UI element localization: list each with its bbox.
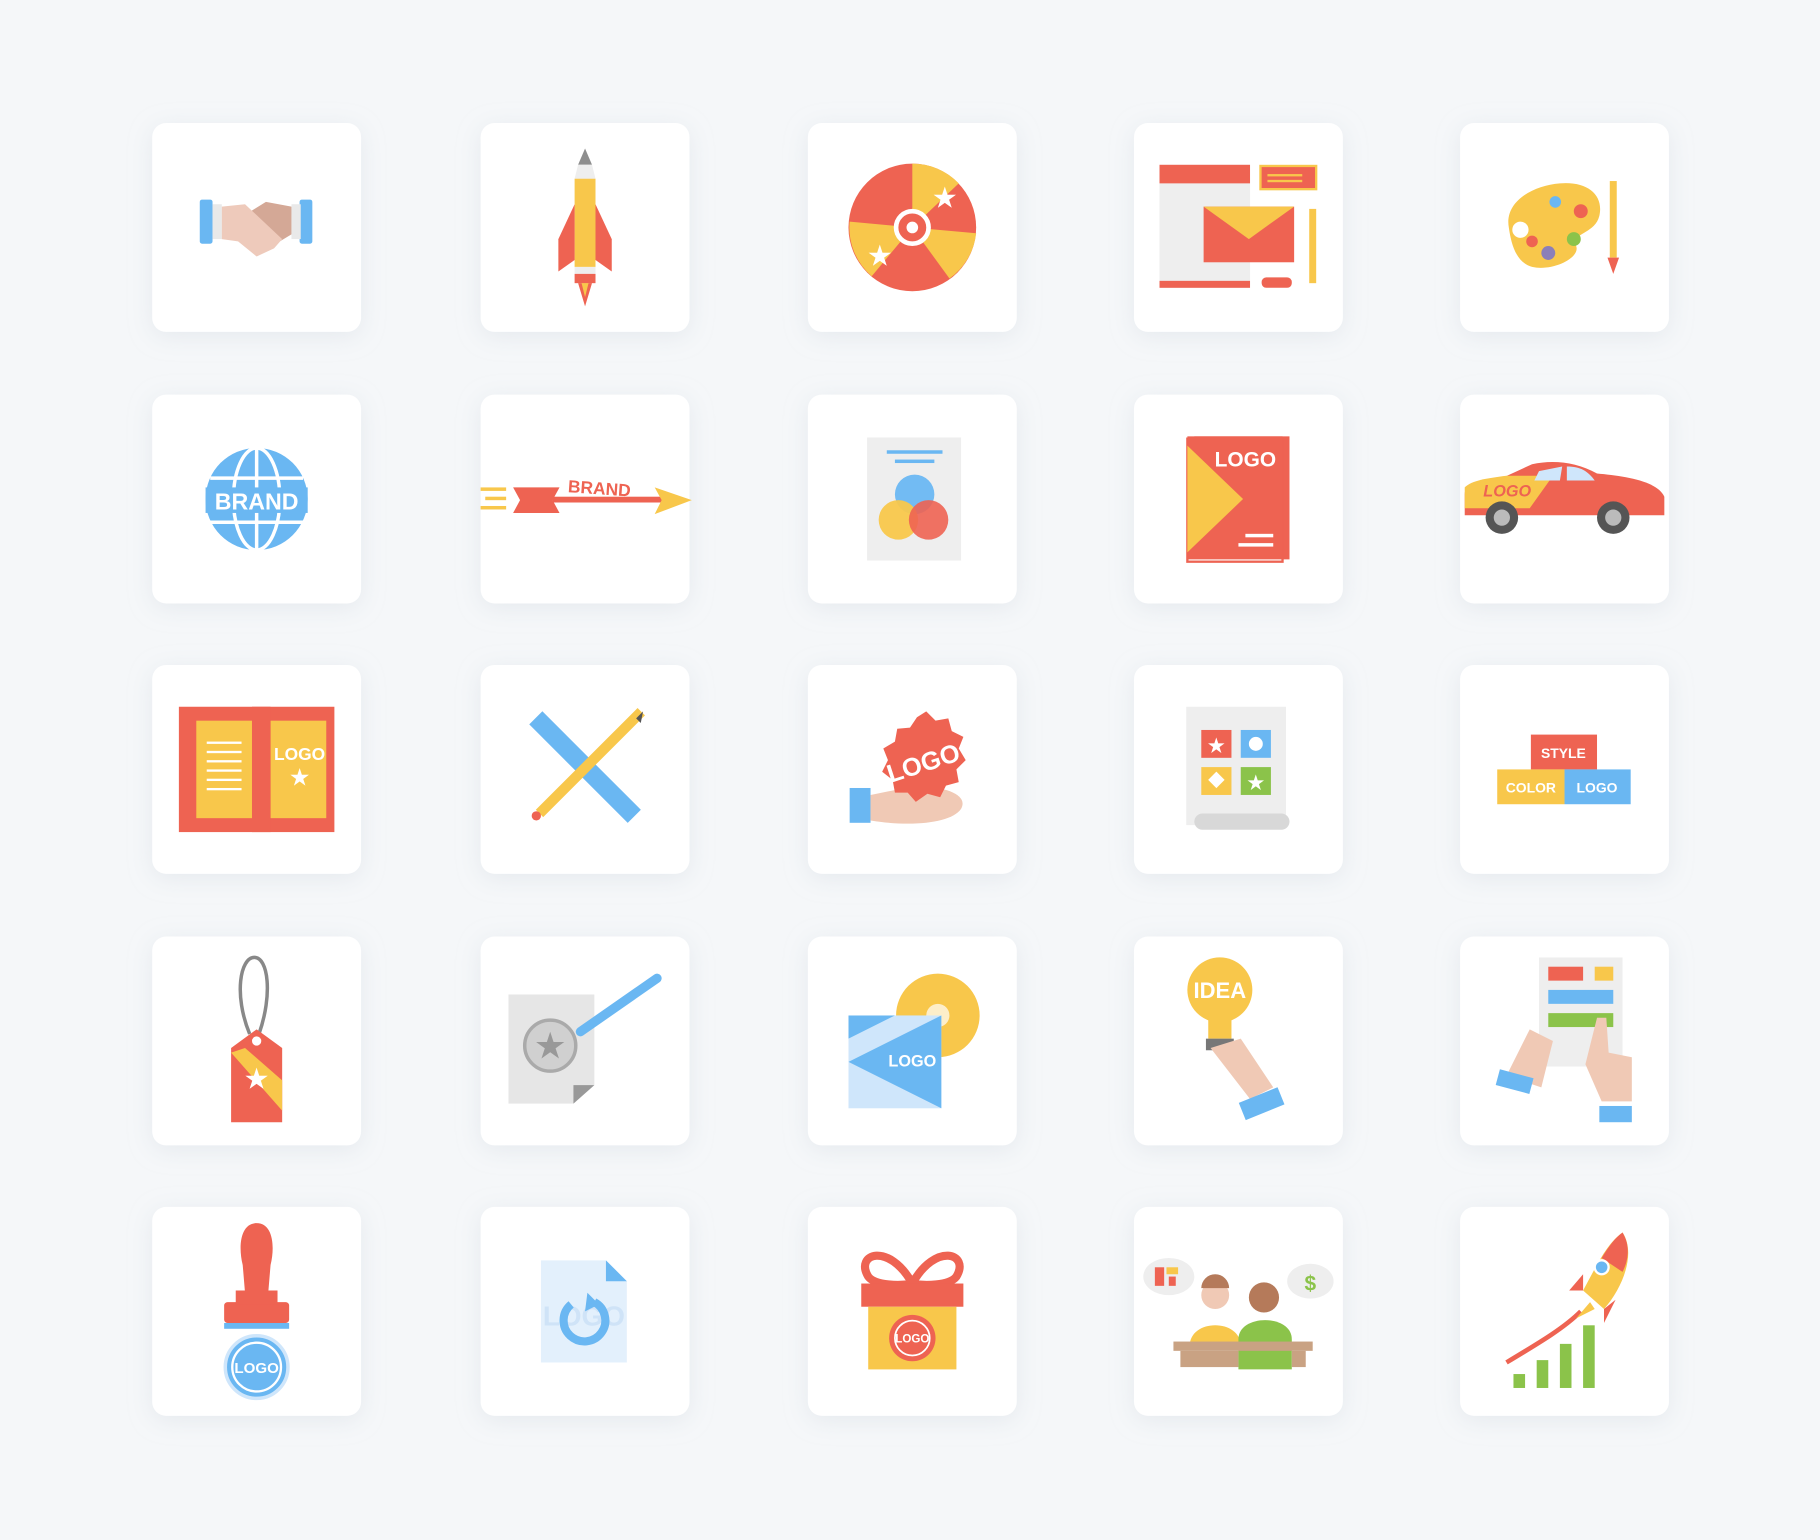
icon: logo car: LOGO	[1483, 483, 1531, 501]
icon: handshake	[200, 200, 312, 256]
icon: disc: ★	[868, 243, 892, 271]
icon: style blocks	[1497, 735, 1631, 804]
card: stamp	[152, 1207, 361, 1416]
card: logo book	[1134, 395, 1343, 603]
icon: meeting: $	[1305, 1272, 1317, 1295]
icon: logo badge hand: LOGO	[884, 739, 964, 789]
card: logo file	[481, 1207, 690, 1416]
icon: palette	[1508, 181, 1619, 274]
icon: idea bulb	[1187, 957, 1284, 1120]
icon: meeting	[1143, 1258, 1334, 1369]
card: logo cd	[808, 937, 1017, 1145]
card: disc	[808, 123, 1017, 332]
card: hands document	[1460, 937, 1669, 1145]
icon: brand globe: BRAND	[215, 488, 299, 514]
card: brochure	[152, 665, 361, 874]
card: growth rocket	[1460, 1207, 1669, 1416]
icon: disc: ★	[933, 185, 957, 213]
icon: idea bulb: IDEA	[1194, 978, 1246, 1003]
icon: signing document: ★	[536, 1028, 565, 1064]
card: signing document	[481, 937, 690, 1145]
icon: stamp	[224, 1223, 289, 1398]
icon: stationery	[1160, 165, 1317, 288]
card: gift	[808, 1207, 1017, 1416]
card: stationery	[1134, 123, 1343, 332]
icon: disc	[848, 164, 976, 291]
card: brand globe	[152, 395, 361, 603]
icon: style board: ★	[1208, 735, 1225, 756]
card: idea bulb	[1134, 937, 1343, 1145]
icon: style blocks: LOGO	[1577, 780, 1618, 796]
icon: logo book: LOGO	[1215, 449, 1276, 472]
card: ruler and pencil	[481, 665, 690, 874]
icon: logo file: LOGO	[543, 1300, 625, 1331]
icon: gift: LOGO	[895, 1333, 929, 1346]
card: style board	[1134, 665, 1343, 874]
card: brand arrow	[481, 395, 692, 603]
icon: color print	[867, 438, 961, 561]
icon: logo book	[1187, 436, 1289, 562]
icon: logo badge hand	[850, 711, 966, 824]
icon: gift	[861, 1256, 963, 1369]
icon: style blocks: STYLE	[1541, 745, 1586, 761]
icon: logo car	[1465, 462, 1664, 534]
card: tag	[152, 937, 361, 1145]
icon: style blocks: COLOR	[1506, 780, 1556, 796]
card: style blocks	[1460, 665, 1669, 874]
icon: growth rocket	[1507, 1232, 1628, 1388]
icon: brand arrow: BRAND	[567, 476, 631, 501]
card: meeting	[1134, 1207, 1343, 1416]
icon: ruler and pencil	[529, 708, 645, 823]
icon: pencil rocket	[558, 149, 612, 306]
icon: hands document	[1496, 957, 1632, 1122]
icon: logo cd	[848, 974, 980, 1108]
card: color print	[808, 395, 1017, 603]
icon: logo cd: LOGO	[888, 1053, 936, 1071]
icon: style board: ★	[1248, 772, 1265, 793]
card: logo car	[1460, 395, 1669, 603]
card: handshake	[152, 123, 361, 332]
icon: brand arrow	[481, 476, 692, 514]
icon: stamp: LOGO	[234, 1360, 279, 1377]
icon: logo file	[541, 1260, 627, 1362]
card: pencil rocket	[481, 123, 690, 332]
icon: tag: ★	[245, 1065, 269, 1093]
icon: tag	[231, 957, 282, 1122]
icon: brand globe	[206, 448, 308, 550]
card: palette	[1460, 123, 1669, 332]
icon: brochure	[179, 707, 334, 832]
icon: style board	[1186, 707, 1289, 830]
icon: signing document	[508, 978, 657, 1104]
card: logo badge hand	[808, 665, 1017, 874]
icon: brochure: ★	[290, 767, 309, 790]
icon: brochure: LOGO	[274, 744, 325, 764]
